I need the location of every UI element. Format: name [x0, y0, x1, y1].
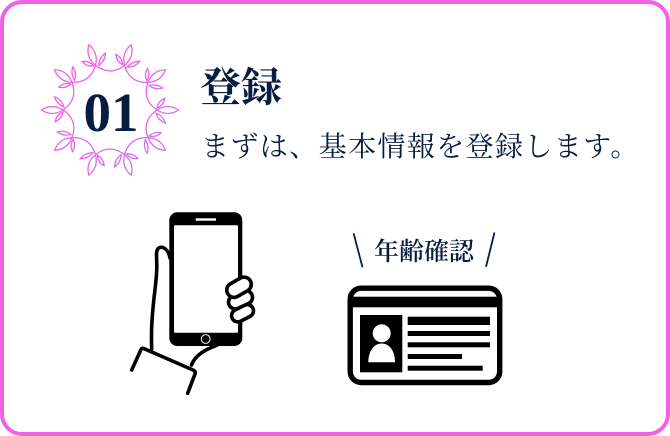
icon: hand holding smartphone: [132, 212, 256, 393]
left slash: [354, 233, 362, 267]
heading: 登録: [200, 54, 282, 114]
description text: まずは、基本情報を登録します。: [201, 125, 640, 165]
photo shoulders: [368, 344, 395, 362]
phone screen: [174, 225, 238, 333]
phone home button: [201, 335, 210, 343]
sleeve cuff: [132, 348, 195, 393]
step number: 01: [84, 82, 138, 143]
right slash: [486, 232, 494, 267]
hand: thumb and wrist: [151, 247, 170, 349]
label: age verification: [354, 232, 494, 268]
text lines: [408, 317, 490, 371]
ID photo: [360, 315, 402, 372]
card outline: [350, 288, 500, 382]
phone speaker: [196, 218, 216, 221]
hand: palm: [192, 344, 219, 365]
fingers: [224, 274, 256, 324]
label text: 年齢確認: [374, 232, 476, 268]
icon: ID card: [350, 288, 500, 382]
card band: [350, 297, 500, 307]
icon: floral wreath: [40, 44, 180, 176]
photo head: [373, 324, 391, 342]
phone body: [169, 212, 242, 346]
